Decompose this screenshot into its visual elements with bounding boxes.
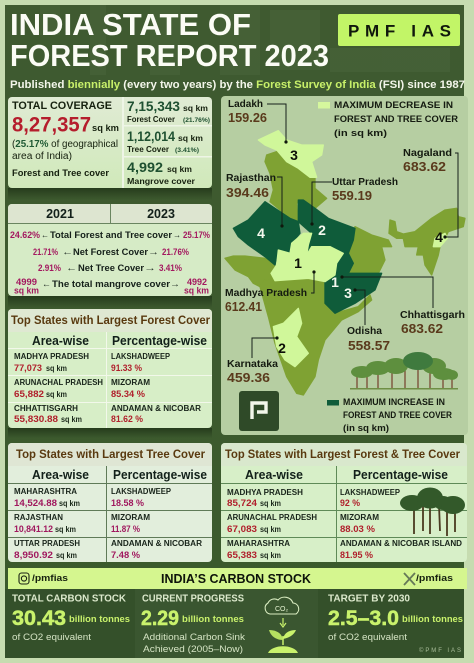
forest cover: 7,15,343 [127, 99, 180, 114]
icon: instagram [19, 573, 29, 584]
heading: Top States with Largest Tree Cover [16, 449, 206, 461]
row: net tree cover: 2.91% [38, 263, 61, 274]
area-wise rows: 85,724 [227, 498, 258, 509]
column headers: Area-wise [32, 468, 89, 482]
percentage-wise rows: LAKSHADWEEP [340, 488, 401, 497]
area-wise rows: sq km [56, 551, 77, 560]
area-wise rows: sq km [46, 364, 67, 373]
rank numbers: 4 [257, 225, 265, 241]
state: Ladakh and Jammu Kashmir [258, 131, 323, 177]
label: Uttar Pradesh [332, 177, 398, 203]
label: Chhattisgarh: 683.62 [401, 321, 443, 336]
area-wise rows: 8,950.92 [14, 550, 53, 561]
label: Uttar Pradesh: 559.19 [332, 188, 372, 203]
row: total mangrove cover: 4992 [187, 277, 207, 288]
label: Rajasthan [226, 173, 276, 200]
area-wise rows: MAHARASHTRA [227, 539, 290, 548]
area-wise rows: sq km [46, 390, 67, 399]
area-wise rows: MADHYA PRADESH [227, 488, 303, 497]
label: Ladakh: Ladakh [228, 99, 263, 110]
icon: P logo [239, 391, 279, 431]
stat: current progress: Achieved (2005–Now) [143, 644, 243, 654]
tree cover: (3.41%) [175, 148, 199, 154]
row: total mangrove cover: 4999 [16, 277, 37, 288]
row: total forest and tree cover: 24.62% [10, 230, 41, 241]
tree cover [127, 129, 203, 154]
panel: top states largest forest and tree cover [221, 443, 467, 562]
area-wise rows: 10,841.12 [14, 524, 53, 535]
legend: maximum decrease: FOREST AND TREE COVER [334, 114, 458, 125]
label: Odisha: Odisha [347, 326, 382, 337]
area-wise rows: CHHATTISGARH [14, 404, 78, 413]
stat: target by 2030: billion tonnes [402, 614, 463, 624]
row: total forest and tree cover [10, 230, 210, 241]
percentage-wise rows [340, 488, 462, 561]
legend: maximum increase [327, 397, 452, 433]
forest cover: (21.76%) [183, 118, 210, 124]
label: Odisha: 558.57 [348, 338, 390, 353]
stat: total carbon stock: billion tonnes [69, 614, 130, 624]
mangrove cover: sq km [167, 164, 192, 174]
forest cover: sq km [183, 103, 208, 113]
state: Chhattisgarh and Odisha [325, 253, 382, 313]
panel: 2021 vs 2023 comparison: 2021 [46, 207, 74, 221]
stat: target by 2030: ©PMF IAS [419, 647, 461, 654]
label: Rajasthan: Rajasthan [226, 173, 276, 184]
row: total forest and tree cover: Total Forest and Tree cover [50, 230, 172, 241]
area-wise rows: sq km [55, 525, 76, 534]
stat: total carbon stock: of CO2 equivalent [12, 632, 92, 642]
percentage-wise rows: ANDAMAN & NICOBAR ISLAND [340, 539, 462, 548]
column headers [32, 468, 207, 482]
panel: forest and tree map [221, 96, 468, 435]
label: Madhya Pradesh: 612.41 [225, 299, 262, 314]
label: Karnataka: 459.36 [227, 370, 270, 385]
area-wise rows: sq km [260, 551, 281, 560]
label: Madhya Pradesh: Madhya Pradesh [225, 288, 307, 299]
rank numbers: 1 [294, 255, 302, 271]
stat: current progress: 2.29 [141, 607, 179, 630]
total figure: TOTAL COVERAGE [12, 100, 112, 112]
rank numbers: 2 [278, 340, 286, 356]
row: total mangrove cover [14, 277, 209, 296]
area-wise rows [227, 488, 317, 561]
state: Madhya Pradesh [271, 233, 343, 282]
percentage-wise rows: 91.33 % [111, 363, 142, 374]
legend: maximum increase: FOREST AND TREE COVER [343, 410, 452, 420]
total figure: 8,27,357 [12, 114, 91, 136]
row: total forest and tree cover: ← [41, 230, 49, 241]
row: net tree cover: Net Tree Cover [78, 263, 144, 274]
label: Rajasthan: 394.46 [226, 185, 269, 200]
stat: total carbon stock: TOTAL CARBON STOCK [12, 594, 126, 604]
panel: total coverage [8, 97, 212, 200]
area-wise rows: 65,882 [14, 389, 44, 400]
mangrove cover: Mangrove cover [127, 176, 196, 186]
north-east states [389, 208, 465, 275]
percentage-wise rows [111, 352, 201, 425]
row: net tree cover: ← [66, 263, 77, 274]
title: INDIA STATE OF [10, 7, 251, 42]
legend: maximum decrease: MAXIMUM DECREASE IN [334, 100, 453, 111]
icon: X [404, 573, 415, 585]
column headers [32, 334, 207, 348]
stat: target by 2030 [328, 594, 463, 654]
area-wise rows [14, 352, 103, 425]
percentage-wise rows: 88.03 % [340, 524, 376, 535]
row: total mangrove cover: → [170, 279, 180, 290]
percentage-wise rows: 18.58 % [111, 498, 145, 509]
panel: 2021 vs 2023 comparison [8, 204, 212, 308]
percentage-wise rows [111, 487, 202, 561]
rank numbers [257, 147, 443, 356]
row: net forest cover: 21.71% [33, 247, 58, 258]
legend: maximum decrease: (in sq km) [334, 128, 387, 139]
area-wise rows: sq km [61, 415, 82, 424]
carbon stock strip: /pmfias [416, 573, 453, 583]
eastern states [343, 227, 392, 273]
row: total mangrove cover: ← [42, 279, 51, 290]
label: Karnataka: Karnataka [227, 359, 278, 370]
stat: current progress: Additional Carbon Sink [143, 632, 246, 642]
panel: 2021 vs 2023 comparison: 2023 [147, 207, 175, 221]
icon: CO2 cloud and plant: CO₂ [275, 606, 288, 613]
label: Nagaland [403, 148, 452, 174]
legend: maximum increase: (in sq km) [343, 423, 389, 433]
label: Madhya Pradesh [225, 288, 307, 314]
panel: top states largest forest cover [8, 309, 212, 438]
area-wise rows: 14,524.88 [14, 498, 57, 509]
area-wise rows: 55,830.88 [14, 414, 58, 425]
percentage-wise rows: 81.62 % [111, 414, 143, 425]
area-wise rows: 67,083 [227, 524, 257, 535]
label: Ladakh: 159.26 [228, 110, 267, 125]
stat: target by 2030: TARGET BY 2030 [328, 594, 411, 604]
column headers: Percentage-wise [353, 468, 448, 482]
logo: PMF IAS: PMF IAS [348, 22, 451, 40]
logo: PMF IAS [338, 14, 460, 46]
percentage-wise rows: 11.87 % [111, 524, 140, 535]
title: FOREST REPORT 2023 [10, 38, 329, 73]
percentage-wise rows: MIZORAM [111, 378, 150, 387]
percentage-wise rows: 85.34 % [111, 389, 146, 400]
percentage-wise rows: 81.95 % [340, 550, 374, 561]
state: Uttar Pradesh [298, 200, 355, 255]
tree cover: 1,12,014 [127, 129, 175, 144]
label: Chhattisgarh [400, 310, 465, 336]
percentage-wise rows: MIZORAM [111, 513, 150, 522]
peninsular states [260, 278, 372, 395]
row: total forest and tree cover: 25.17% [183, 230, 210, 241]
rank numbers: 2 [318, 222, 326, 238]
stat: total carbon stock: 30.43 [12, 607, 66, 630]
label: Karnataka [227, 359, 278, 385]
panel: top states largest tree cover [8, 443, 212, 562]
rank numbers: 3 [344, 285, 352, 301]
column headers: Percentage-wise [112, 334, 207, 348]
percentage-wise rows: MIZORAM [340, 513, 379, 522]
tree cover: sq km [178, 133, 203, 143]
state: Karnataka [273, 308, 308, 367]
total figure: area of India) [12, 151, 72, 162]
leader lines [252, 104, 458, 358]
stat: target by 2030: of CO2 equivalent [328, 632, 408, 642]
row: total mangrove cover: The total mangrove cover [52, 279, 170, 290]
area-wise rows: MAHARASHTRA [14, 487, 77, 496]
area-wise rows: 77,073 [14, 363, 42, 374]
carbon stock strip: INDIA’S CARBON STOCK [161, 571, 312, 586]
row: total mangrove cover: sq km [14, 286, 39, 296]
area-wise rows: MADHYA PRADESH [14, 352, 89, 361]
column headers: Area-wise [32, 334, 89, 348]
column headers: Percentage-wise [113, 468, 207, 482]
total figure [12, 100, 119, 178]
mangrove cover: 4,992 [127, 160, 163, 175]
carbon stock strip: /pmfias [32, 573, 68, 583]
row: total mangrove cover: sq km [184, 286, 209, 296]
heading: Top States with Largest Forest Cover [11, 315, 211, 327]
area-wise rows: ARUNACHAL PRADESH [227, 513, 317, 522]
title [10, 7, 329, 73]
label: Nagaland: 683.62 [403, 159, 446, 174]
label: Odisha [347, 326, 390, 353]
area-wise rows: sq km [59, 499, 80, 508]
forest cover: Forest Cover [127, 115, 175, 124]
area-wise rows: UTTAR PRADESH [14, 539, 80, 548]
row: net forest cover: → [148, 247, 159, 258]
gujarat [225, 256, 275, 287]
stat: current progress: CURRENT PROGRESS [142, 594, 244, 604]
row: net tree cover [38, 263, 182, 274]
icon: forest illustration [350, 352, 458, 390]
row: net tree cover: 3.41% [159, 263, 182, 274]
percentage-wise rows: ANDAMAN & NICOBAR [111, 539, 202, 548]
stat: total carbon stock [12, 594, 130, 642]
label: Ladakh [228, 99, 267, 125]
area-wise rows: 65,383 [227, 550, 257, 561]
area-wise rows: ARUNACHAL PRADESH [14, 378, 103, 387]
forest cover [127, 99, 210, 124]
row: net forest cover: ← [62, 247, 73, 258]
label: Chhattisgarh: Chhattisgarh [400, 310, 465, 321]
stat: current progress: billion tonnes [182, 614, 244, 624]
tree cover: Tree Cover [127, 145, 169, 154]
row: net forest cover [33, 247, 189, 258]
icon: trees [400, 488, 465, 536]
percentage-wise rows: LAKSHADWEEP [111, 487, 172, 496]
subtitle: Published biennially (every two years) by the Forest Survey of India (FSI) since 1987 [10, 79, 465, 91]
stat: current progress [141, 594, 246, 654]
area-wise rows: sq km [260, 499, 281, 508]
area-wise rows [14, 487, 80, 561]
rank numbers: 1 [331, 274, 339, 290]
icon: CO2 cloud and plant [265, 597, 299, 653]
total figure: (25.17% of geographical [12, 139, 118, 150]
legend: maximum increase: MAXIMUM INCREASE IN [343, 397, 445, 407]
heading: Top States with Largest Forest & Tree Cover [225, 449, 461, 461]
carbon stock strip [8, 568, 467, 589]
area-wise rows: sq km [260, 525, 281, 534]
percentage-wise rows: 92 % [340, 498, 361, 509]
rank numbers: 3 [290, 147, 298, 163]
state: Rajasthan [233, 202, 300, 265]
rank numbers: 4 [435, 229, 443, 245]
state: Nagaland [433, 233, 447, 247]
percentage-wise rows: LAKSHADWEEP [111, 352, 171, 361]
label: Nagaland: Nagaland [403, 148, 452, 159]
carbon panel backgrounds [5, 589, 464, 658]
percentage-wise rows: ANDAMAN & NICOBAR [111, 404, 201, 413]
row: net forest cover: 21.76% [162, 247, 189, 258]
row: total forest and tree cover: → [173, 230, 181, 241]
legend: maximum decrease [318, 100, 458, 139]
northern states [265, 152, 327, 222]
column headers [245, 468, 448, 482]
map of India [225, 131, 465, 395]
total figure: sq km [92, 123, 119, 133]
area-wise rows: RAJASTHAN [14, 513, 63, 522]
stat: target by 2030: 2.5–3.0 [328, 607, 399, 630]
total figure: Forest and Tree cover [12, 168, 110, 178]
label: Uttar Pradesh: Uttar Pradesh [332, 177, 398, 188]
mangrove cover [127, 160, 196, 186]
row: net tree cover: → [144, 263, 156, 274]
percentage-wise rows: 7.48 % [111, 550, 141, 561]
row: net forest cover: Net Forest Cover [73, 247, 148, 258]
column headers: Area-wise [245, 468, 303, 482]
